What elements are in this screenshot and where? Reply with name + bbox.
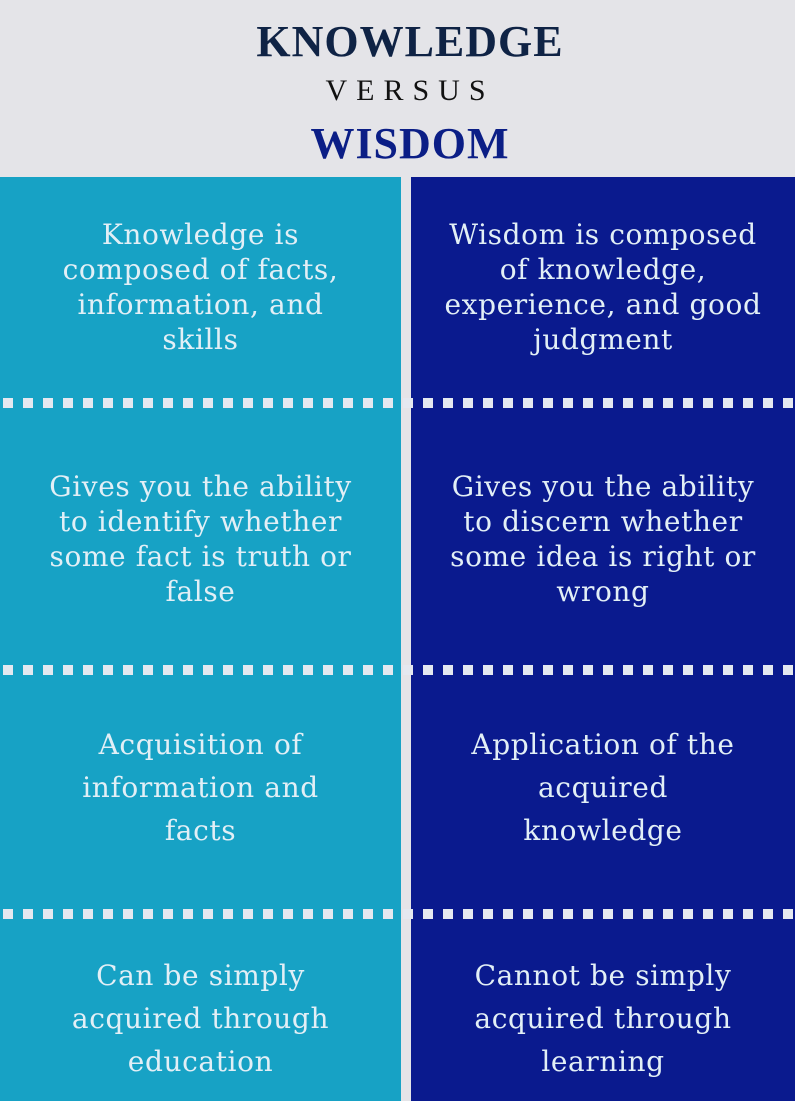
- panel: wisdom: [411, 177, 795, 1101]
- text: wisdom row 4: acquired through: [474, 1002, 732, 1034]
- heading: wisdom: WISDOM: [310, 119, 510, 168]
- text: knowledge row 3: Acquisition of: [99, 728, 302, 760]
- text: wisdom row 1: experience, and good: [445, 288, 761, 321]
- text: wisdom row 2: [450, 470, 756, 608]
- text: wisdom row 2: wrong: [556, 575, 650, 608]
- text: knowledge row 3: information and: [82, 770, 319, 804]
- text: knowledge row 1: Knowledge is: [102, 218, 299, 251]
- text: wisdom row 4: Cannot be simply: [475, 958, 731, 992]
- text: knowledge row 2: [49, 470, 352, 608]
- text: wisdom row 3: [471, 728, 735, 846]
- text: knowledge row 1: skills: [162, 323, 239, 356]
- text: wisdom row 1: of knowledge,: [500, 253, 706, 286]
- text: wisdom row 1: Wisdom is composed: [449, 218, 757, 251]
- text: knowledge row 4: acquired through: [72, 1002, 329, 1034]
- text: knowledge row 2: some fact is truth or: [49, 540, 352, 573]
- text: knowledge row 4: Can be simply: [96, 958, 305, 992]
- text: wisdom row 1: [445, 218, 761, 356]
- heading: versus: VERSUS: [325, 74, 495, 107]
- text: knowledge row 1: composed of facts,: [63, 253, 338, 286]
- text: wisdom row 2: some idea is right or: [450, 540, 756, 573]
- text: knowledge row 1: information, and: [77, 288, 323, 321]
- text: wisdom row 1: judgment: [533, 323, 673, 356]
- text: knowledge row 2: Gives you the ability: [49, 470, 352, 503]
- text: wisdom row 2: Gives you the ability: [452, 470, 754, 503]
- text: knowledge row 2: to identify whether: [59, 505, 342, 538]
- text: knowledge row 2: false: [166, 575, 235, 608]
- text: wisdom row 4: learning: [541, 1044, 665, 1078]
- panel: knowledge: [0, 177, 401, 1101]
- text: knowledge row 3: facts: [165, 814, 236, 846]
- text: knowledge row 4: education: [128, 1044, 273, 1078]
- text: knowledge row 1: [63, 218, 338, 356]
- heading: knowledge: KNOWLEDGE: [256, 17, 564, 66]
- text: wisdom row 4: [474, 958, 732, 1078]
- text: wisdom row 3: acquired: [538, 770, 668, 804]
- text: wisdom row 3: Application of the: [471, 728, 735, 760]
- text: wisdom row 3: knowledge: [523, 814, 683, 846]
- text: knowledge row 4: [72, 958, 329, 1078]
- text: knowledge row 3: [82, 728, 319, 846]
- text: wisdom row 2: to discern whether: [463, 505, 743, 538]
- title: [256, 17, 564, 168]
